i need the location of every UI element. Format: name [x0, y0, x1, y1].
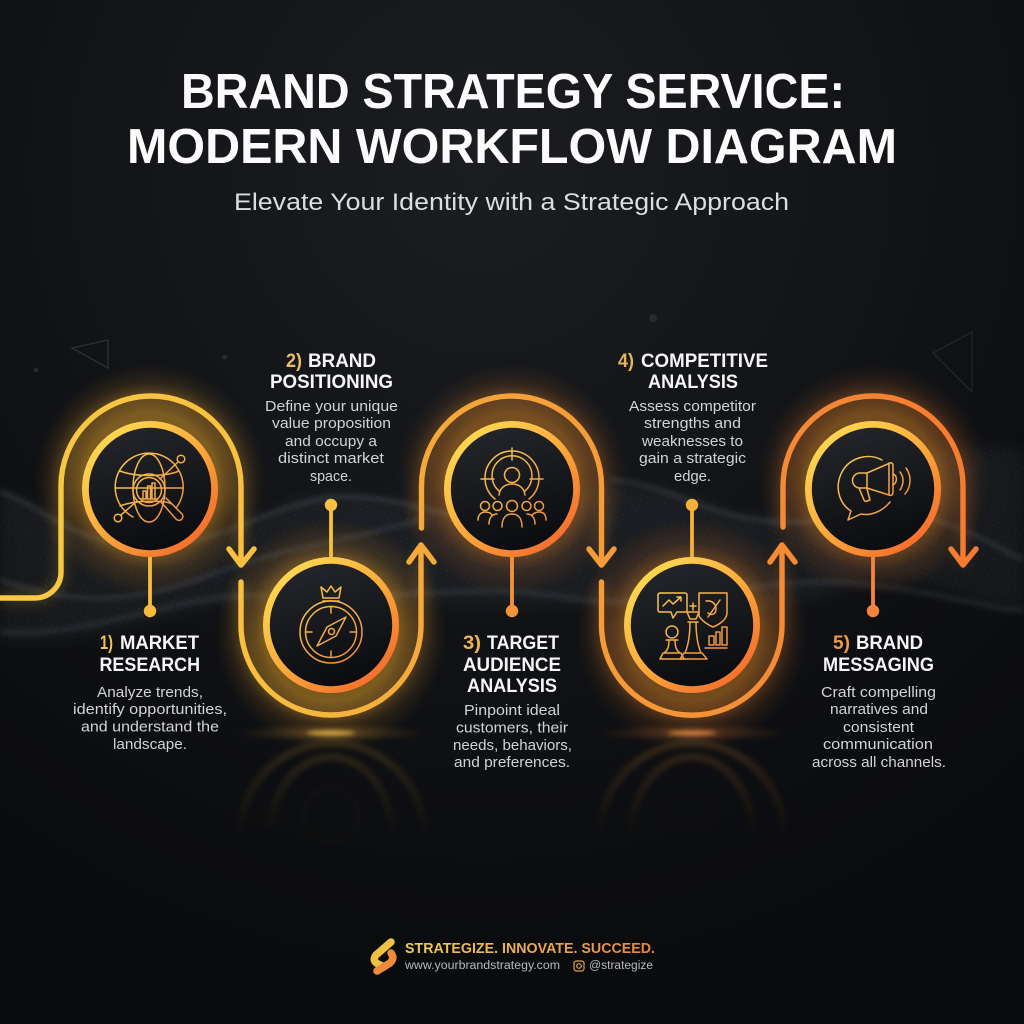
description: competitive analysis: edge. — [674, 469, 711, 485]
heading: market research: 1) — [100, 633, 113, 654]
description: brand messaging: consistent — [843, 720, 914, 736]
description: competitive analysis — [629, 399, 756, 485]
route segment 1 with down arrow — [0, 396, 254, 598]
description: brand messaging: narratives and — [830, 702, 928, 718]
description: brand messaging: across all channels. — [812, 755, 946, 771]
social handle: @strategize — [589, 960, 653, 972]
icon: crowned compass — [300, 586, 362, 663]
step 2 text — [265, 351, 398, 485]
heading: brand messaging: 5) — [833, 633, 850, 654]
background mesh wave — [0, 447, 1024, 643]
heading: target audience analysis: TARGET — [487, 633, 559, 654]
route segment 3 with down arrow — [422, 396, 614, 565]
description: brand messaging: Craft compelling — [821, 685, 936, 701]
step 3 text — [453, 633, 572, 771]
footer — [374, 941, 655, 972]
step 5 circle — [808, 424, 938, 554]
step 3 circle — [447, 424, 577, 554]
description: target audience: needs, behaviors, — [453, 738, 572, 754]
description: competitive analysis: gain a strategic — [639, 451, 747, 467]
description: brand messaging: communication — [823, 737, 933, 753]
connector step 5 — [867, 557, 879, 617]
description: brand positioning: space. — [310, 469, 352, 485]
connector step 3 — [506, 557, 518, 617]
heading: market research: MARKET — [120, 633, 199, 654]
step 4 circle — [627, 560, 757, 690]
heading: market research: RESEARCH — [100, 655, 200, 676]
decorative dots — [34, 314, 657, 372]
connector step 2 — [325, 499, 337, 558]
connector step 4 — [686, 499, 698, 558]
title: BRAND STRATEGY SERVICE: — [181, 65, 845, 119]
route segment 4 with up arrow — [602, 545, 795, 715]
icon: instagram — [574, 961, 584, 971]
heading: target audience analysis — [463, 633, 561, 697]
heading: target audience analysis: ANALYSIS — [467, 676, 557, 697]
icon: S logo — [374, 942, 393, 971]
heading: market research — [100, 633, 200, 676]
description: brand positioning: value proposition — [272, 416, 391, 432]
heading: brand positioning: BRAND — [308, 351, 376, 372]
heading: brand positioning: 2) — [286, 351, 302, 372]
decorative triangle right — [933, 332, 972, 392]
heading: competitive analysis: 4) — [618, 351, 634, 372]
heading: target audience analysis: 3) — [463, 633, 481, 654]
heading: brand positioning — [270, 351, 393, 393]
description: competitive analysis: weaknesses to — [641, 434, 743, 450]
website: www.yourbrandstrategy.com — [404, 960, 560, 972]
step 1 circle — [85, 424, 215, 554]
icon: megaphone in speech bubble — [838, 456, 910, 520]
description: market research: landscape. — [113, 737, 187, 753]
floor reflections — [236, 724, 787, 842]
heading: competitive analysis — [618, 351, 768, 393]
step 4 text — [618, 351, 768, 485]
description: brand positioning: and occupy a — [285, 434, 378, 450]
description: market research: identify opportunities, — [73, 702, 227, 718]
heading: competitive analysis: ANALYSIS — [648, 372, 738, 393]
description: market research: and understand the — [81, 720, 219, 736]
heading: brand positioning: POSITIONING — [270, 372, 393, 393]
halos behind step circles — [34, 364, 989, 750]
subtitle: Elevate Your Identity with a Strategic Approach — [234, 189, 789, 216]
step 1 text — [73, 633, 227, 753]
description: brand messaging — [812, 685, 946, 771]
icon: target audience — [478, 448, 546, 527]
description: target audience — [453, 703, 572, 771]
description: brand positioning: Define your unique — [265, 399, 398, 415]
route segment 5 with down arrow — [783, 396, 976, 565]
description: market research — [73, 685, 227, 753]
heading: competitive analysis: COMPETITIVE — [641, 351, 768, 372]
description: market research: Analyze trends, — [97, 685, 203, 701]
description: brand positioning: distinct market — [278, 451, 384, 467]
icon: globe with magnifier and chart — [114, 453, 185, 522]
icon: chess strategy — [658, 593, 727, 659]
step 5 text — [812, 633, 946, 771]
title — [127, 65, 897, 174]
description: brand positioning — [265, 399, 398, 485]
reflection under step 2 — [236, 724, 426, 842]
heading: target audience analysis: AUDIENCE — [463, 655, 561, 676]
description: target audience: and preferences. — [454, 755, 570, 771]
heading: brand messaging — [823, 633, 934, 676]
step 2 circle — [266, 560, 396, 690]
description: competitive analysis: strengths and — [644, 416, 741, 432]
description: target audience: customers, their — [456, 720, 568, 736]
workflow route with arrows — [0, 396, 976, 715]
heading: brand messaging: MESSAGING — [823, 655, 934, 676]
description: competitive analysis: Assess competitor — [629, 399, 756, 415]
route segment 2 with up arrow — [241, 545, 434, 715]
connector step 1 — [144, 557, 156, 617]
reflection under step 4 — [597, 724, 787, 835]
route glow — [0, 396, 963, 715]
decorative triangle left — [72, 340, 108, 368]
tagline: STRATEGIZE. INNOVATE. SUCCEED. — [405, 941, 655, 957]
description: target audience: Pinpoint ideal — [464, 703, 560, 719]
title: MODERN WORKFLOW DIAGRAM — [127, 120, 897, 174]
heading: brand messaging: BRAND — [856, 633, 923, 654]
